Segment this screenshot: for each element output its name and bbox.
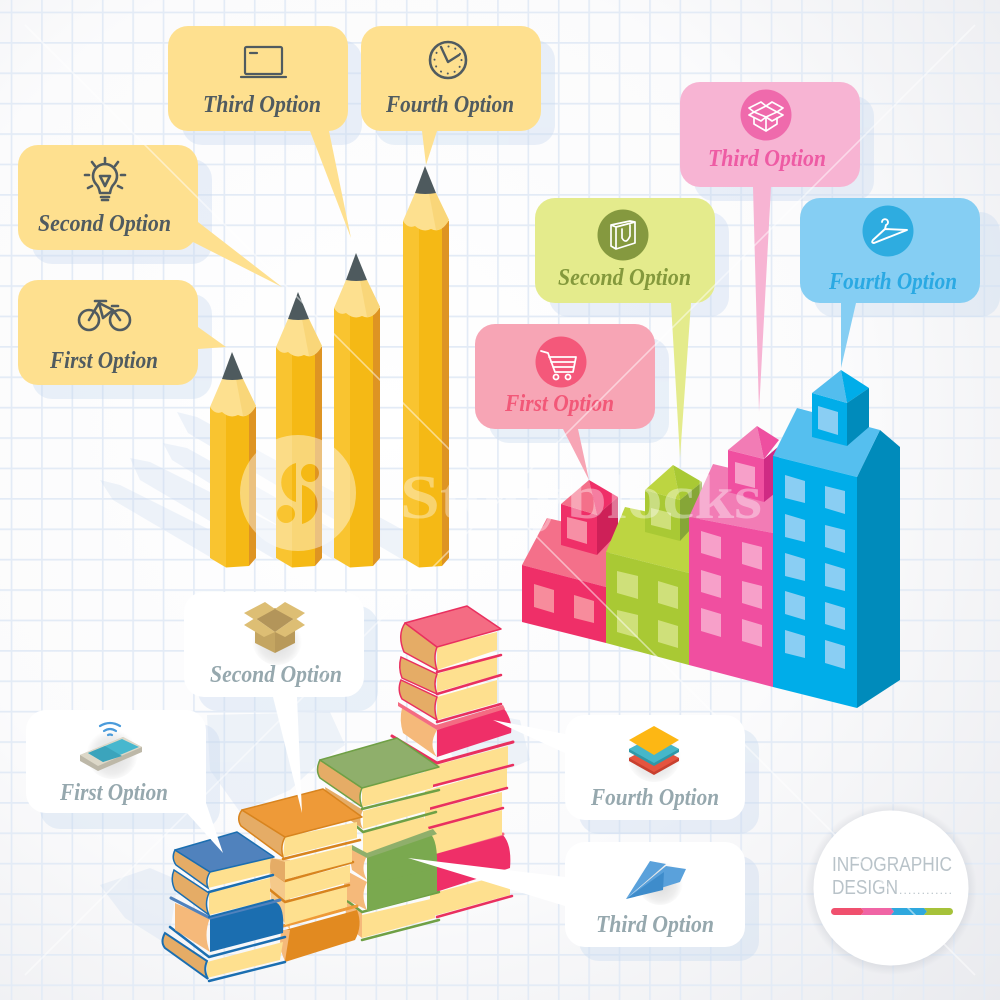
bubble: building third option [680,82,860,412]
icon: coat hanger [862,206,914,256]
green building [606,465,702,665]
label: Second Option [210,662,342,688]
bubble: building fourth option [800,198,980,368]
red building [522,480,618,643]
icon: clock [430,42,466,78]
watermark text: Storyblocks [400,464,762,532]
pencil 3 [334,253,380,568]
badge title: INFOGRAPHIC [832,854,952,876]
label: Second Option [38,211,171,237]
icon: open box [740,90,792,140]
blue building [773,370,900,708]
label: Second Option [558,265,691,291]
bubble: book fourth option [493,715,745,820]
orange book stack [239,789,362,962]
icon: shopping cart [536,336,586,388]
bubble: pencil second option [18,145,282,287]
icon: paper plane [626,859,686,905]
pencil cast shadows [100,412,403,560]
watermark logo [240,435,356,551]
label: Fourth Option [828,269,957,295]
bubble: pencil first option [18,280,226,385]
label: First Option [504,391,614,417]
red book stack [392,606,513,917]
book cast shadows [100,705,530,945]
badge colour bar [831,908,953,915]
label: Third Option [708,146,826,172]
bubble: building first option [475,324,655,480]
label: Fourth Option [590,785,719,811]
pencil 1 [210,352,256,568]
blue book stack [162,832,285,981]
icon: stacked layers [627,726,681,782]
bubble: building second option [535,198,715,458]
bubble: book third option [408,842,745,947]
badge subtitle: DESIGN [832,877,898,899]
pink building [689,426,780,687]
icon: laptop [241,47,286,77]
icon: shopping bag [598,210,648,260]
building chart [522,370,900,708]
pencil 4 [403,166,449,568]
label: Third Option [596,912,714,938]
book chart [162,606,513,981]
badge: infographic design [805,803,977,975]
icon: smartphone with wifi [80,723,142,779]
pencil chart [210,166,449,568]
label: First Option [59,780,168,806]
badge dots: ............ [899,883,952,897]
icon: light bulb [85,158,125,200]
green book stack [318,738,439,940]
bubble: book first option [26,710,223,853]
bubble: pencil fourth option [361,26,541,165]
label: First Option [49,348,158,374]
bubble: pencil third option [168,26,351,238]
bubble: book second option [184,592,364,813]
icon: bicycle [79,301,130,330]
icon: cardboard box [244,602,305,665]
label: Fourth Option [385,92,514,118]
label: Third Option [203,92,321,118]
pencil 2 [276,292,322,568]
